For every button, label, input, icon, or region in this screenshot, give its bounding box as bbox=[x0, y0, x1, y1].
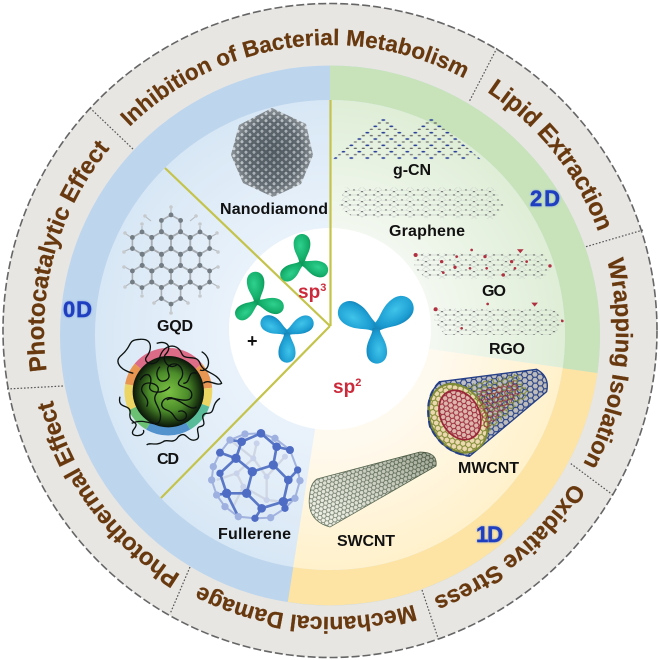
ring label: Wrapping Isolation: Wrapping Isolation bbox=[584, 256, 634, 468]
ring label: Photocatalytic Effect: Photocatalytic Effect bbox=[27, 140, 110, 372]
icon: graphene sheet bbox=[339, 187, 504, 219]
label: Graphene: Graphene bbox=[389, 223, 465, 240]
ring label: Mechanical Damage: Mechanical Damage bbox=[196, 587, 417, 634]
orbital: small blue bbox=[257, 312, 317, 363]
dimension sectors outer band bbox=[60, 66, 600, 606]
icon: graphene quantum dot bbox=[122, 205, 220, 315]
ring label: Lipid Extraction: Lipid Extraction bbox=[488, 78, 609, 231]
orbital: green sp3 lower bbox=[232, 271, 285, 323]
label: g-CN: g-CN bbox=[393, 162, 431, 179]
label: sp3: sp bbox=[298, 282, 320, 303]
dimension sectors inner band bbox=[95, 100, 565, 570]
label: MWCNT: MWCNT bbox=[458, 460, 519, 477]
icon: reduced graphene oxide sheet bbox=[433, 303, 564, 335]
label: CD: CD bbox=[157, 451, 179, 468]
orbital: large blue sp2 bbox=[333, 290, 419, 364]
label: sp2: sp bbox=[333, 377, 355, 398]
white centre circle bbox=[229, 228, 431, 430]
label: SWCNT: SWCNT bbox=[337, 533, 395, 550]
icon: g-CN sheet bbox=[332, 117, 482, 160]
dimension label 0D: 0D bbox=[63, 297, 92, 322]
label: plus sign: + bbox=[247, 331, 258, 351]
icon: single-walled carbon nanotube bbox=[309, 452, 436, 527]
ring label: Inhibition of Bacterial Metabolism: Inhibition of Bacterial Metabolism bbox=[120, 28, 468, 126]
label: sp2: 2 bbox=[355, 377, 361, 389]
icon: nanodiamond bbox=[231, 108, 313, 197]
icon: multi-walled carbon nanotube bbox=[417, 369, 547, 463]
dimension label 2D: 2D bbox=[530, 186, 560, 211]
label: GQD: GQD bbox=[157, 318, 193, 335]
icon: carbon dot bbox=[118, 339, 222, 445]
icon: fullerene bbox=[208, 429, 304, 522]
label: Fullerene: Fullerene bbox=[218, 526, 291, 543]
ring label: Photothermal Effect: Photothermal Effect bbox=[38, 400, 180, 588]
sector separator lines bbox=[161, 100, 330, 498]
label: Nanodiamond: Nanodiamond bbox=[220, 201, 328, 218]
label: RGO: RGO bbox=[489, 341, 525, 358]
label: sp3: 3 bbox=[320, 282, 326, 294]
orbital: green sp3 upper bbox=[277, 234, 330, 285]
icon: graphene oxide sheet bbox=[413, 249, 552, 279]
ring label: Oxidative Stress: Oxidative Stress bbox=[435, 486, 584, 608]
label: GO: GO bbox=[482, 283, 506, 300]
dimension label 1D: 1D bbox=[476, 522, 503, 547]
